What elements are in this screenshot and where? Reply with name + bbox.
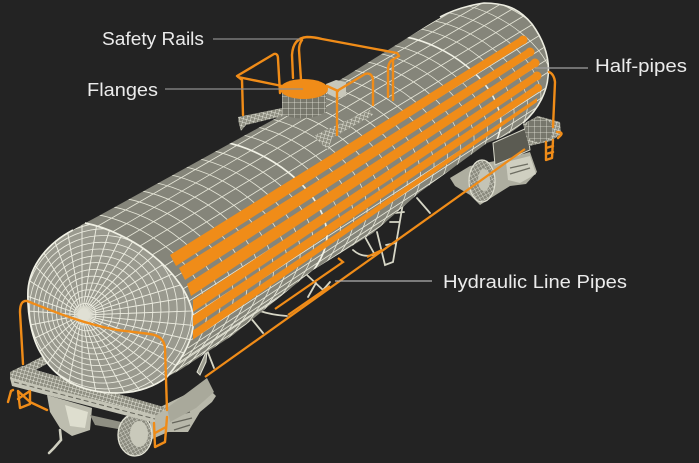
cream fitting [326, 80, 346, 98]
tank mesh [85, 0, 582, 383]
half-pipes [170, 36, 542, 340]
axle [90, 415, 135, 432]
front undercarriage [10, 350, 216, 456]
hose [49, 430, 61, 453]
flange neck [282, 89, 326, 119]
far ladder [546, 140, 553, 160]
rail: front [20, 301, 167, 410]
far dome outline [440, 3, 548, 123]
left walkway [238, 108, 283, 131]
leader: half-pipes [535, 67, 588, 69]
coupler block [47, 395, 92, 436]
rail: right top [327, 74, 373, 135]
rail: left top [237, 54, 282, 115]
front wheel [118, 414, 152, 456]
front left ladder [8, 390, 47, 410]
rear truck [450, 128, 537, 205]
front rear frame rail [20, 356, 52, 371]
head rim [28, 223, 193, 393]
rear springs [506, 156, 536, 183]
mid-frame brackets and legs [205, 198, 430, 368]
label: hydraulic line pipes: Hydraulic Line Pipes [443, 272, 627, 292]
deck [10, 366, 167, 416]
safety rails [8, 37, 562, 447]
top platform and flange [238, 79, 373, 150]
hydraulic line pipes [205, 149, 525, 377]
rear deck [523, 116, 561, 146]
leader: safety rails [213, 38, 300, 40]
flange top [280, 79, 328, 99]
rear wheel [469, 160, 495, 202]
right walkway [315, 110, 373, 150]
leader: flanges [165, 88, 303, 90]
bright ribs [225, 37, 501, 298]
rail: big rear [292, 37, 399, 100]
rail: far end [549, 72, 562, 138]
front truck [47, 385, 216, 456]
label: flanges: Flanges [87, 80, 158, 100]
front right ladder [154, 417, 167, 447]
spring set [150, 385, 216, 440]
leader: hydraulic [335, 280, 432, 282]
tank head [28, 223, 192, 392]
side frame [167, 378, 214, 422]
label: half-pipes: Half-pipes [595, 56, 687, 76]
tank body [20, 0, 582, 402]
rear undercarriage [450, 116, 561, 205]
label: safety rails: Safety Rails [102, 29, 204, 49]
